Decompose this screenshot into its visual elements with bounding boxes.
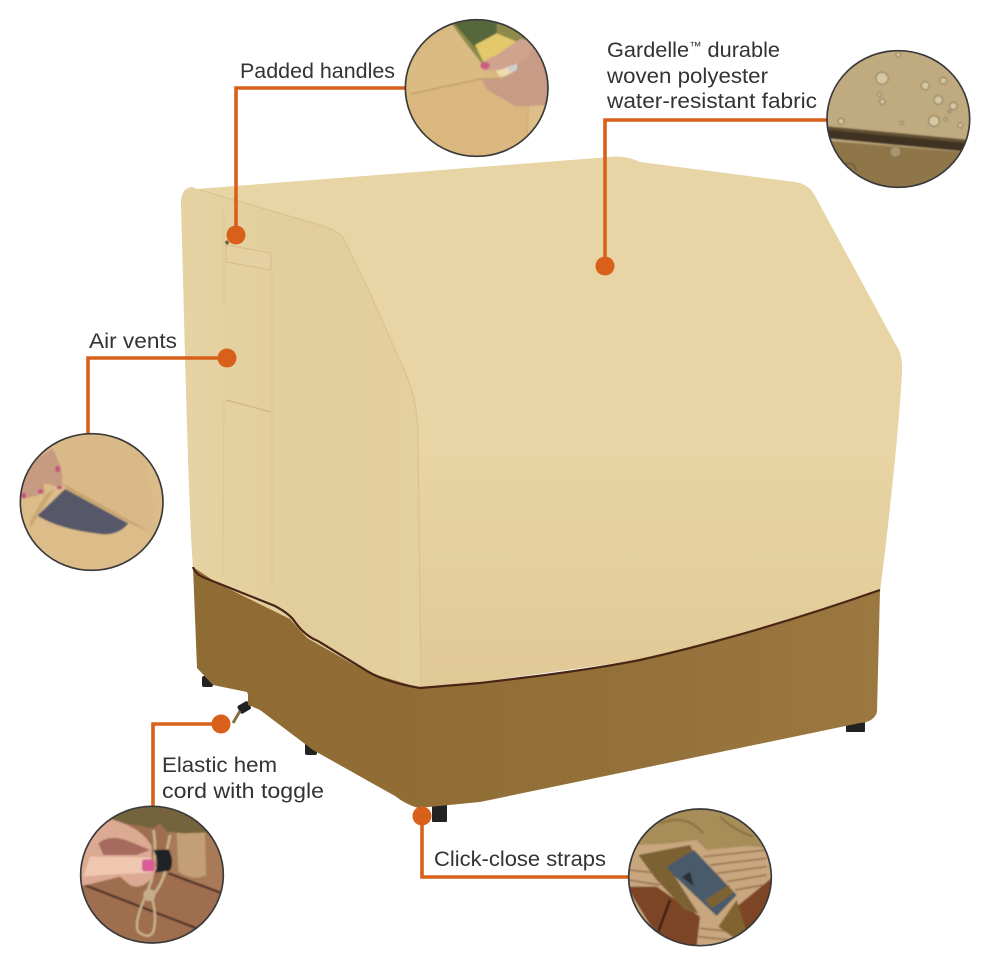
product: patio furniture cover (181, 157, 902, 822)
seams (200, 190, 421, 688)
elastic cord and toggle (233, 692, 254, 723)
label (606, 39, 817, 113)
handle (226, 241, 271, 270)
leader line (605, 120, 827, 266)
callout: click-close straps (412, 806, 772, 946)
callout: water-resistant fabric (596, 39, 980, 276)
leader line (236, 88, 405, 235)
photo: toggle and cord (80, 806, 224, 944)
label: durable (702, 39, 780, 62)
piping (193, 567, 880, 688)
photo: air vent (20, 432, 164, 572)
label: Click-close straps (434, 848, 606, 871)
label: water-resistant fabric (606, 90, 817, 113)
label: ™ (689, 39, 702, 53)
photo: buckle strap (628, 808, 772, 946)
left side panel (181, 187, 421, 688)
feet (202, 676, 865, 822)
label: Gardelle (607, 39, 686, 62)
label: Air vents (89, 330, 177, 353)
leader line (422, 816, 628, 877)
label (162, 754, 324, 803)
leader line (153, 724, 221, 807)
photo: padded handle (404, 18, 549, 158)
callout: elastic hem cord with toggle (80, 714, 323, 944)
callout: air vents (20, 332, 236, 572)
photo: water droplets on fabric (826, 50, 970, 188)
label: Elastic hem (162, 754, 277, 777)
callout: padded handles (226, 10, 560, 244)
leader line (88, 358, 227, 434)
air vent (226, 400, 271, 412)
upper beige cover (181, 157, 902, 688)
lower brown skirt (193, 567, 880, 808)
label: cord with toggle (162, 780, 324, 803)
label: woven polyester (606, 65, 768, 88)
label: Padded handles (240, 60, 395, 83)
